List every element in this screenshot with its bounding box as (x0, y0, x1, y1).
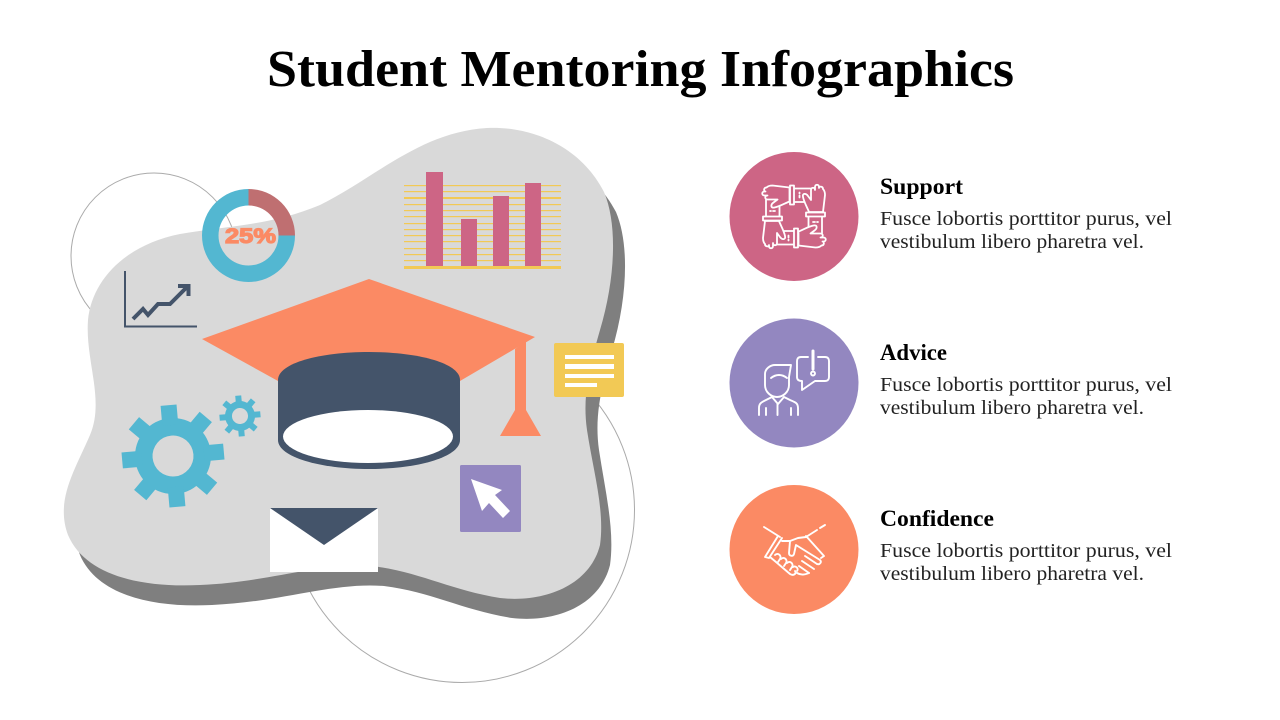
item: confidence (730, 485, 1172, 614)
cap board (202, 279, 535, 400)
text: advice: Fusce lobortis porttitor purus, vel (880, 374, 1172, 396)
heading: advice: Advice (880, 340, 947, 365)
text: advice: vestibulum libero pharetra vel. (880, 397, 1144, 419)
icon circle: confidence (730, 485, 858, 614)
icon: line chart (125, 271, 197, 326)
graduation cap (202, 279, 541, 469)
donut label: 25% (225, 225, 276, 248)
text: support: Fusce lobortis porttitor purus, vel (880, 208, 1172, 230)
icon circle: advice (730, 318, 858, 448)
heading: support: Support (880, 174, 963, 199)
blob shadow (76, 148, 625, 619)
icon: cursor (460, 465, 521, 532)
item: support (730, 152, 1172, 281)
note card (554, 343, 624, 397)
text: confidence: vestibulum libero pharetra vel. (880, 563, 1144, 585)
blob background (64, 128, 613, 599)
icon: small gear (218, 394, 262, 438)
text: support (880, 208, 1172, 253)
icon circle: support (730, 152, 858, 281)
text: confidence: Fusce lobortis porttitor purus, vel (880, 540, 1172, 562)
icon: handshake (764, 525, 825, 575)
text: confidence (880, 540, 1172, 585)
text: advice (880, 374, 1172, 419)
decorative outline circle: bottom (290, 338, 634, 682)
title: Student Mentoring Infographics (267, 41, 1014, 98)
icon: joined hands (762, 185, 826, 248)
icon: person with speech bubble (759, 351, 829, 415)
donut chart (202, 189, 295, 282)
illustration (64, 128, 635, 682)
bar chart (404, 172, 561, 269)
decorative outline circle: left (71, 173, 237, 339)
item: advice (730, 318, 1172, 448)
cap base (278, 352, 460, 469)
heading: confidence: Confidence (880, 506, 994, 531)
icon: envelope (270, 508, 378, 572)
tassel (500, 341, 541, 436)
cap opening (283, 410, 453, 463)
icon: large gear (118, 401, 228, 511)
text: support: vestibulum libero pharetra vel. (880, 231, 1144, 253)
